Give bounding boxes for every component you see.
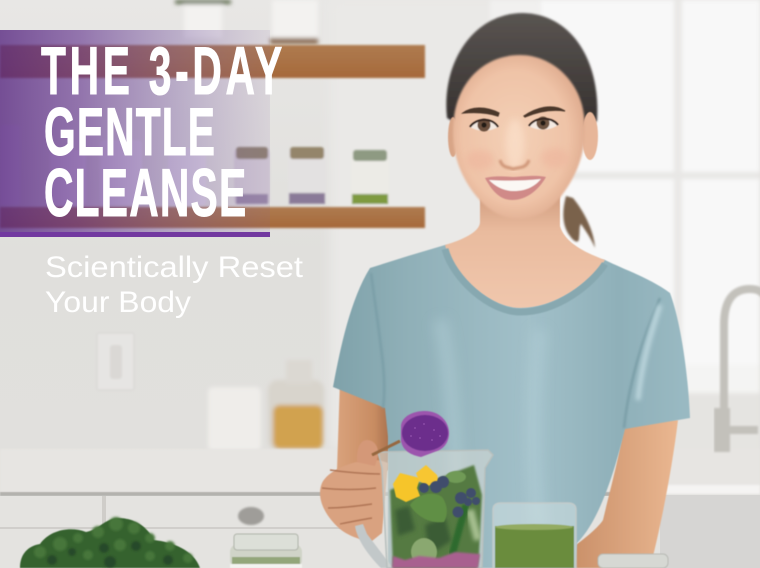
scoop of purple powder <box>372 411 449 457</box>
canisters on counter <box>208 360 324 451</box>
ponytail <box>563 196 595 248</box>
eyes <box>470 116 558 132</box>
subtitle <box>45 251 304 319</box>
window <box>540 0 760 455</box>
arm left <box>337 380 390 500</box>
shelf items top <box>175 0 318 44</box>
ears <box>582 112 598 160</box>
title: GENTLE <box>44 93 215 170</box>
eyebrows <box>463 107 565 117</box>
mango <box>393 473 420 502</box>
purple title band <box>0 30 270 233</box>
title <box>41 32 282 231</box>
hand and fist <box>320 460 388 541</box>
neck <box>445 190 605 308</box>
faucet <box>722 289 760 452</box>
cabinets <box>0 495 760 568</box>
blueberries <box>419 476 480 518</box>
title: THE 3-DAY <box>41 32 282 109</box>
hair <box>446 13 597 127</box>
face <box>453 55 585 219</box>
kale <box>20 517 200 568</box>
purple base <box>392 552 480 568</box>
glass jar bottom right <box>598 554 668 568</box>
face shading <box>506 119 524 171</box>
counter top <box>0 449 760 493</box>
wall outlet <box>97 333 134 390</box>
lower wood shelf <box>0 207 425 228</box>
greens <box>390 465 482 568</box>
subtitle: Your Body <box>45 286 191 319</box>
small jar front <box>230 534 302 568</box>
subtitle: Scientically Reset <box>45 251 304 284</box>
shirt <box>333 245 690 568</box>
mouth <box>485 176 546 200</box>
band underline <box>0 232 270 237</box>
nose <box>500 160 529 169</box>
jars on shelf <box>0 125 389 205</box>
green smoothie glass <box>493 503 576 568</box>
upper wood shelf <box>0 45 425 78</box>
blender <box>355 450 493 568</box>
title: CLEANSE <box>44 154 246 231</box>
arm right <box>570 420 678 568</box>
woman <box>320 13 690 568</box>
